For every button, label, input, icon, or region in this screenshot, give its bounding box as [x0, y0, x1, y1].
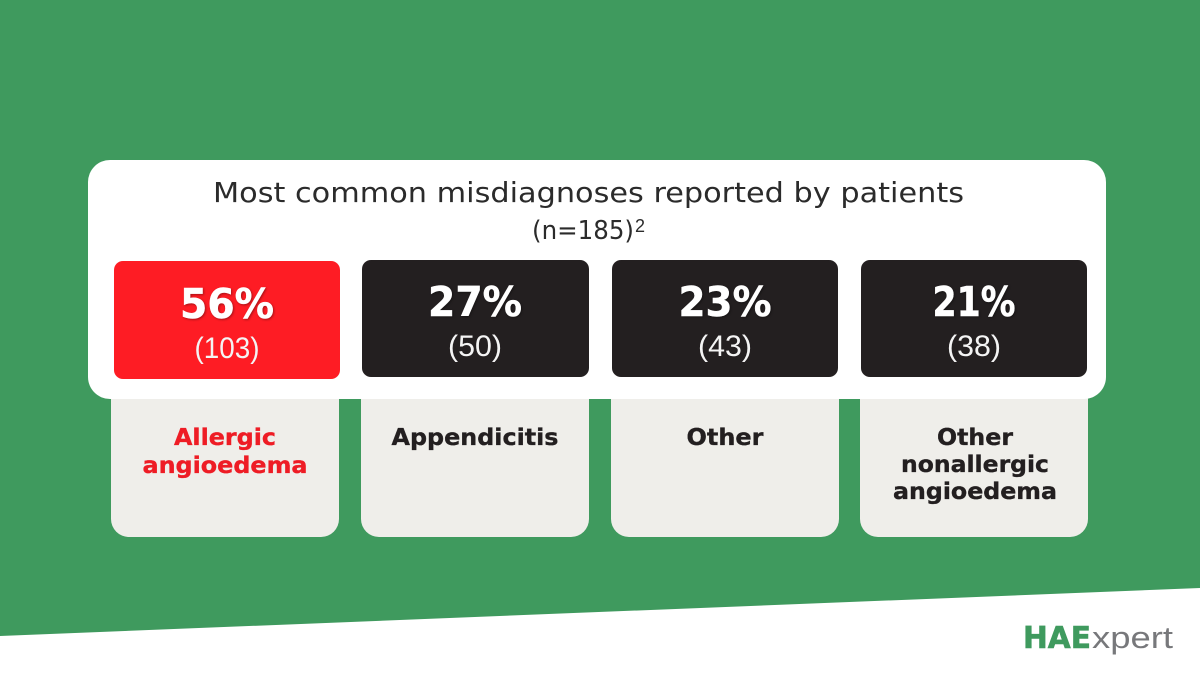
label card: other nonallergic angioedema: angioedema — [893, 479, 1057, 505]
label card: appendicitis: Appendicitis — [392, 425, 558, 451]
label card: allergic angioedema: angioedema — [142, 453, 308, 479]
stat box: 27% — [362, 260, 589, 377]
label card: other nonallergic angioedema: Other — [937, 425, 1014, 451]
label card: allergic angioedema: Allergic — [174, 425, 276, 451]
stat box: 23%: (43) — [698, 330, 752, 363]
logo: HAExpert — [1023, 620, 1173, 656]
label card: other — [611, 395, 839, 537]
stat box: 27%: (50) — [448, 330, 502, 363]
label card: other: Other — [686, 425, 764, 451]
logo: HAExpert: xpert — [1092, 620, 1173, 655]
title: 2 — [635, 216, 645, 236]
stat box: 21% — [861, 260, 1087, 377]
label card: other nonallergic angioedema — [860, 395, 1088, 537]
title: Most common misdiagnoses reported by patients — [213, 176, 964, 209]
title — [213, 176, 964, 246]
stat box: 56%: 56% — [180, 280, 274, 328]
label card: other nonallergic angioedema: nonallergic — [901, 452, 1049, 478]
title: (n=185) — [532, 216, 634, 246]
stat box: 21%: (38) — [947, 330, 1001, 363]
stat box: 56% — [114, 261, 340, 379]
stat box: 23% — [612, 260, 838, 377]
panel: label cards — [111, 395, 1088, 537]
label card: appendicitis — [361, 395, 589, 537]
stat box: 27%: 27% — [428, 278, 522, 326]
panel: white results card — [88, 160, 1106, 399]
stat box: 23%: 23% — [678, 278, 772, 326]
logo: HAExpert: HAE — [1023, 621, 1091, 656]
stat box: 56%: (103) — [194, 332, 260, 365]
label card: allergic angioedema — [111, 395, 339, 537]
stat box: 21%: 21% — [932, 278, 1016, 326]
